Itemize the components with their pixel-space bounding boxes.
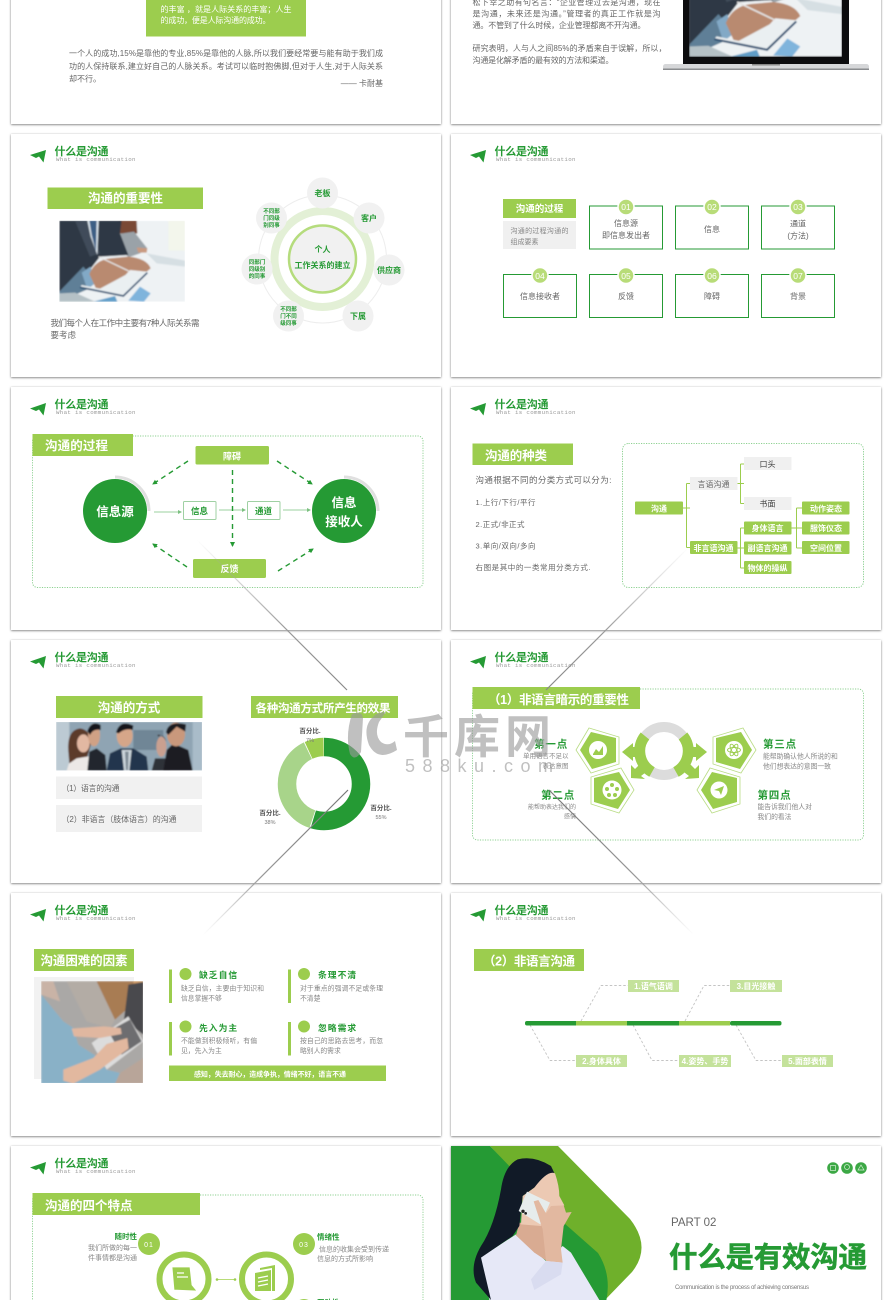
point texts: 第三点 xyxy=(763,738,797,750)
header: What is communication xyxy=(496,409,576,416)
circular relationship diagram: 别同事 xyxy=(263,221,280,229)
tree diagram: 空间位置 xyxy=(810,543,842,553)
body text: 是沟通，未来还是沟通。”管理者的真正工作就是沟 xyxy=(472,8,660,18)
factor: preconception: 先入为主 xyxy=(199,1022,238,1033)
numbered boxes: 通道 xyxy=(790,218,806,228)
slide 10: nonverbal timeline xyxy=(451,893,881,1136)
factor: lack of confidence: 信息掌握不够 xyxy=(181,994,222,1002)
slide 8: nonverbal importance xyxy=(451,640,881,883)
header: 什么是沟通 xyxy=(54,650,108,664)
woman on phone xyxy=(474,1158,599,1300)
tree diagram: 书面 xyxy=(760,498,776,508)
header: 什么是沟通 xyxy=(54,1156,108,1170)
heading: process xyxy=(503,199,576,249)
item 01: 01 xyxy=(144,1242,154,1249)
circular relationship diagram: 个人 xyxy=(314,245,330,254)
green quote box: 的丰富 ，就是人际关系的丰富；人生 xyxy=(160,4,292,14)
numbered boxes: 信息接收者 xyxy=(520,291,560,301)
pentagon icon: first point xyxy=(576,728,619,773)
slide 5: communication process flow xyxy=(11,387,441,630)
tree diagram: 言语沟通 xyxy=(698,479,730,489)
tree diagram: 服饰仪态 xyxy=(810,523,842,533)
header: What is communication xyxy=(56,915,136,922)
ring icon: document xyxy=(242,1254,291,1300)
heading banner: （2）非语言沟通 xyxy=(483,954,575,968)
dashed panel xyxy=(472,689,864,840)
numbered boxes: 信息 xyxy=(704,224,720,234)
photo: woman on laptop xyxy=(41,981,143,1084)
heading banner xyxy=(34,949,134,971)
pentagon icon: second point xyxy=(591,768,634,813)
item 03: 信息的方式所影响 xyxy=(317,1254,373,1263)
heading banner xyxy=(472,444,573,465)
tree diagram: 非言语沟通 xyxy=(694,543,734,553)
slide 6: types of communication xyxy=(451,387,881,630)
photo: business team xyxy=(56,722,202,771)
item 03: 03 xyxy=(299,1242,309,1249)
header: 什么是沟通 xyxy=(494,903,548,917)
circular relationship diagram: 级同事 xyxy=(280,319,297,327)
receiver circle: 接收人 xyxy=(325,514,363,529)
grey list items xyxy=(56,776,202,832)
pentagon icon: fourth point xyxy=(697,768,740,813)
classification list: 1.上行/下行/平行 xyxy=(476,497,536,507)
classification list: 沟通根据不同的分类方式可以分为: xyxy=(476,475,612,485)
heading banner: 沟通困难的因素 xyxy=(40,953,128,968)
green arrow shapes xyxy=(451,1146,642,1300)
donut chart: 百分比. xyxy=(370,803,392,812)
slide 1: quote xyxy=(11,0,441,124)
heading banner: （1）非语言暗示的重要性 xyxy=(488,692,629,707)
point texts: 能帮助确认他人所说的和 xyxy=(763,752,838,760)
factor: unclear: 对于重点的强调不足或条理 xyxy=(300,984,383,992)
heading: process: 组成要素 xyxy=(510,237,538,246)
point texts: 单用语言不足以 xyxy=(523,751,569,760)
connector between rings xyxy=(216,1278,236,1281)
item 01: 件事情都是沟通 xyxy=(88,1253,137,1262)
slide 3: importance of communication xyxy=(11,134,441,377)
slide 7: ways and effects xyxy=(11,640,441,883)
header xyxy=(30,397,136,416)
circular relationship diagram: 同级别 xyxy=(249,265,266,273)
tree diagram: 身体语言 xyxy=(752,523,784,533)
heading banner: effects xyxy=(251,696,398,718)
point texts: 感情 xyxy=(564,812,576,820)
circular relationship diagram: 老板 xyxy=(314,188,330,198)
factor: lack of confidence xyxy=(169,968,264,1003)
quote body text xyxy=(69,48,383,88)
factor: preconception xyxy=(169,1020,257,1056)
section subtitle: Communication is the process of achieving consensus xyxy=(675,1285,809,1291)
watermark logo: 588ku.com xyxy=(405,756,561,776)
heading banner xyxy=(48,188,203,209)
source circle: 信息源 xyxy=(96,504,134,519)
numbered boxes: (方法) xyxy=(787,230,809,240)
point texts: 第四点 xyxy=(758,788,791,802)
top-right icons xyxy=(827,1162,867,1174)
body text: 研究表明，人与人之间85%的矛盾来自于误解，所以， xyxy=(472,43,666,53)
tree diagram: 物体的操纵 xyxy=(748,563,788,573)
numbered boxes: 07 xyxy=(793,271,803,281)
point texts: 我们的看法 xyxy=(758,812,792,821)
summary bar xyxy=(169,1066,386,1081)
numbered boxes: 04 xyxy=(535,271,545,281)
grey list items: （2）非语言（肢体语言）的沟通 xyxy=(62,814,176,824)
pentagon icon: third point xyxy=(713,728,756,773)
circular relationship diagram: 工作关系的建立 xyxy=(294,260,350,270)
timeline with connectors xyxy=(525,986,782,1060)
header xyxy=(470,903,576,922)
factor: lack of confidence: 缺乏自信 xyxy=(199,969,238,980)
grey backing xyxy=(34,977,134,1079)
heading banner xyxy=(474,949,584,971)
numbered boxes xyxy=(504,199,834,318)
tree diagram: 副语言沟通 xyxy=(748,543,788,553)
factor: ignoring needs: 忽略需求 xyxy=(318,1022,357,1033)
header xyxy=(30,903,136,922)
watermark logo: 千库网 xyxy=(403,711,556,763)
heading banner xyxy=(32,1193,200,1215)
header: 什么是沟通 xyxy=(494,650,548,664)
header: What is communication xyxy=(56,1168,136,1175)
classification list: 右图是其中的一类常用分类方式. xyxy=(476,562,590,572)
caption: 我们每个人在工作中主要有7种人际关系需 xyxy=(50,318,200,328)
heading banner: 沟通的重要性 xyxy=(88,190,163,206)
timeline labels: 2.身体具体 xyxy=(582,1056,621,1066)
point texts xyxy=(523,738,838,821)
item 01: 我们所做的每一 xyxy=(88,1243,137,1252)
slide 2: laptop and research text xyxy=(451,0,881,124)
photo: businessman writing xyxy=(59,221,185,302)
dashed panel xyxy=(32,1195,423,1300)
header xyxy=(30,1156,136,1175)
donut chart: 百分比. xyxy=(299,726,321,735)
heading: process: 沟通的过程沟通的 xyxy=(510,226,568,235)
header: 什么是沟通 xyxy=(494,397,548,411)
dashed panel xyxy=(32,436,423,588)
header: 什么是沟通 xyxy=(54,397,108,411)
tree diagram: 口头 xyxy=(760,459,776,469)
item 03 xyxy=(293,1232,389,1263)
slide 4: seven elements xyxy=(451,134,881,377)
watermark logo xyxy=(348,711,561,776)
heading banner: effects: 各种沟通方式所产生的效果 xyxy=(256,701,391,715)
grey list items: （1）语言的沟通 xyxy=(62,783,120,793)
circular relationship diagram xyxy=(242,178,404,332)
donut chart: 55% xyxy=(375,815,387,821)
body text: 沟通是化解矛盾的最有效的方法和渠道。 xyxy=(472,55,614,65)
factor: preconception: 不能做到积极倾听，有偏 xyxy=(181,1036,257,1045)
message and channel boxes xyxy=(184,502,280,520)
item 03: 情绪性 xyxy=(317,1232,340,1242)
flow arrows xyxy=(153,461,313,571)
header xyxy=(470,397,576,416)
source circle xyxy=(83,477,149,543)
heading: process: 沟通的过程 xyxy=(516,203,564,215)
factor: ignoring needs: 按自己的思路去思考，而忽 xyxy=(300,1036,383,1045)
factor: ignoring needs: 略别人的需求 xyxy=(300,1046,341,1055)
header: What is communication xyxy=(56,156,136,163)
quote body text: —— 卡耐基 xyxy=(341,78,383,88)
barrier and feedback boxes xyxy=(193,446,269,578)
circular relationship diagram: 不同部 xyxy=(263,207,280,215)
header xyxy=(30,650,136,669)
circular relationship diagram: 同部门 xyxy=(249,258,266,266)
header: What is communication xyxy=(56,409,136,416)
factor: ignoring needs xyxy=(288,1020,383,1056)
timeline labels xyxy=(576,980,833,1067)
classification list xyxy=(476,475,612,572)
message and channel boxes: 信息 xyxy=(191,506,208,516)
classification list: 3.单向/双向/多向 xyxy=(476,540,536,550)
point texts: 第二点 xyxy=(541,788,575,802)
slide 12: section cover xyxy=(451,1146,881,1300)
circular relationship diagram: 不同部 xyxy=(280,305,297,313)
numbered boxes: 信息源 xyxy=(614,218,638,228)
timeline labels: 4.姿势、手势 xyxy=(682,1056,728,1066)
barrier and feedback boxes: 反馈 xyxy=(220,563,239,574)
timeline labels: 5.面部表情 xyxy=(788,1056,827,1066)
item 01: 随时性 xyxy=(114,1231,137,1241)
circular relationship diagram: 客户 xyxy=(361,213,377,223)
numbered boxes: 03 xyxy=(793,202,803,212)
circular relationship diagram: 门同级 xyxy=(263,214,280,222)
receiver circle xyxy=(312,477,378,543)
factor: preconception: 见，先入为主 xyxy=(181,1046,222,1055)
numbered boxes: 反馈 xyxy=(618,291,634,301)
point texts: 第一点 xyxy=(534,738,568,750)
summary bar: 感知，失去耐心，造成争执，情绪不好，语言不通 xyxy=(194,1070,346,1078)
barrier and feedback boxes: 障碍 xyxy=(223,450,241,462)
section title: 什么是有效沟通 xyxy=(669,1242,867,1274)
heading banner: ways xyxy=(56,696,202,718)
header: 什么是沟通 xyxy=(494,144,548,158)
header xyxy=(470,650,576,669)
numbered boxes: 06 xyxy=(707,271,717,281)
point texts: 能告诉我们他人对 xyxy=(758,802,812,811)
header xyxy=(30,144,136,163)
header: 什么是沟通 xyxy=(54,903,108,917)
center ring with arrows xyxy=(622,727,707,779)
point texts: 他们想表达的意图一致 xyxy=(763,762,831,770)
item 01 xyxy=(88,1231,160,1262)
factor: unclear: 条理不清 xyxy=(318,969,357,980)
tree diagram: 沟通 xyxy=(651,504,667,514)
numbered boxes: 01 xyxy=(621,202,631,212)
slide 11: four characteristics xyxy=(11,1146,441,1300)
factor: unclear: 不清楚 xyxy=(300,994,321,1002)
header: 什么是沟通 xyxy=(54,144,108,158)
numbered boxes: 背景 xyxy=(790,291,806,301)
caption: 要考虑 xyxy=(50,330,77,340)
circular relationship diagram: 下属 xyxy=(350,312,366,321)
quote body text: 功的人保持联系,建立好自己的人脉关系。考试可以临时抱佛脚,但对于人生,对于人际关系 xyxy=(69,61,383,71)
circular relationship diagram: 供应商 xyxy=(377,265,401,275)
green quote box xyxy=(146,0,306,36)
ring icon: note xyxy=(160,1254,208,1300)
header xyxy=(470,144,576,163)
item 03: 信息的收集会受到传递 xyxy=(319,1244,389,1254)
heading banner: 沟通的四个特点 xyxy=(45,1198,133,1213)
green quote box: 的成功，便是人际沟通的成功。 xyxy=(160,15,270,25)
header: What is communication xyxy=(496,915,576,922)
donut chart: 7% xyxy=(306,738,314,744)
caption xyxy=(50,318,200,340)
donut chart: 百分比. xyxy=(259,808,281,817)
receiver circle: 信息 xyxy=(331,495,357,510)
numbered boxes: 05 xyxy=(621,271,631,281)
point texts: 能帮助表达我们的 xyxy=(528,803,576,811)
circular relationship diagram: 的同事 xyxy=(249,272,266,280)
circular relationship diagram: 门不同 xyxy=(280,312,297,320)
heading banner: 沟通的过程 xyxy=(45,438,108,453)
item 04 peek xyxy=(293,1297,340,1300)
point texts: 表达意图 xyxy=(542,761,568,770)
heading banner xyxy=(32,434,133,456)
heading banner xyxy=(472,687,640,709)
laptop photo xyxy=(663,0,869,70)
body text xyxy=(472,0,666,65)
message and channel boxes: 通道 xyxy=(255,506,272,516)
numbered boxes: 障碍 xyxy=(704,291,720,301)
slide 9: difficulty factors xyxy=(11,893,441,1136)
factor: unclear xyxy=(288,968,383,1003)
header: What is communication xyxy=(496,662,576,669)
classification list: 2.正式/非正式 xyxy=(476,519,525,529)
tree diagram xyxy=(635,457,850,574)
body text: 通。不管到了什么时候，企业管理都离不开沟通。 xyxy=(472,20,646,30)
header: What is communication xyxy=(56,662,136,669)
numbered boxes: 即信息发出者 xyxy=(602,230,650,240)
watermark diagonal lines xyxy=(197,540,694,935)
header: What is communication xyxy=(496,156,576,163)
donut chart: 38% xyxy=(264,820,276,826)
donut chart xyxy=(259,726,392,826)
quote body text: 却不行。 xyxy=(69,74,101,84)
timeline labels: 1.语气语调 xyxy=(634,981,673,991)
heading banner: ways: 沟通的方式 xyxy=(98,700,161,715)
numbered boxes: 02 xyxy=(707,202,717,212)
heading banner: 沟通的种类 xyxy=(485,448,547,463)
section label: PART 02 xyxy=(671,1217,716,1229)
tree diagram: 动作姿态 xyxy=(810,504,842,514)
timeline labels: 3.目光接触 xyxy=(737,981,775,991)
dashed panel xyxy=(622,444,864,588)
factor: lack of confidence: 缺乏自信，主要由于知识和 xyxy=(181,984,264,992)
quote body text: 一个人的成功,15%是靠他的专业,85%是靠他的人脉,所以我们要经常要与能有助于我们成 xyxy=(69,48,383,58)
